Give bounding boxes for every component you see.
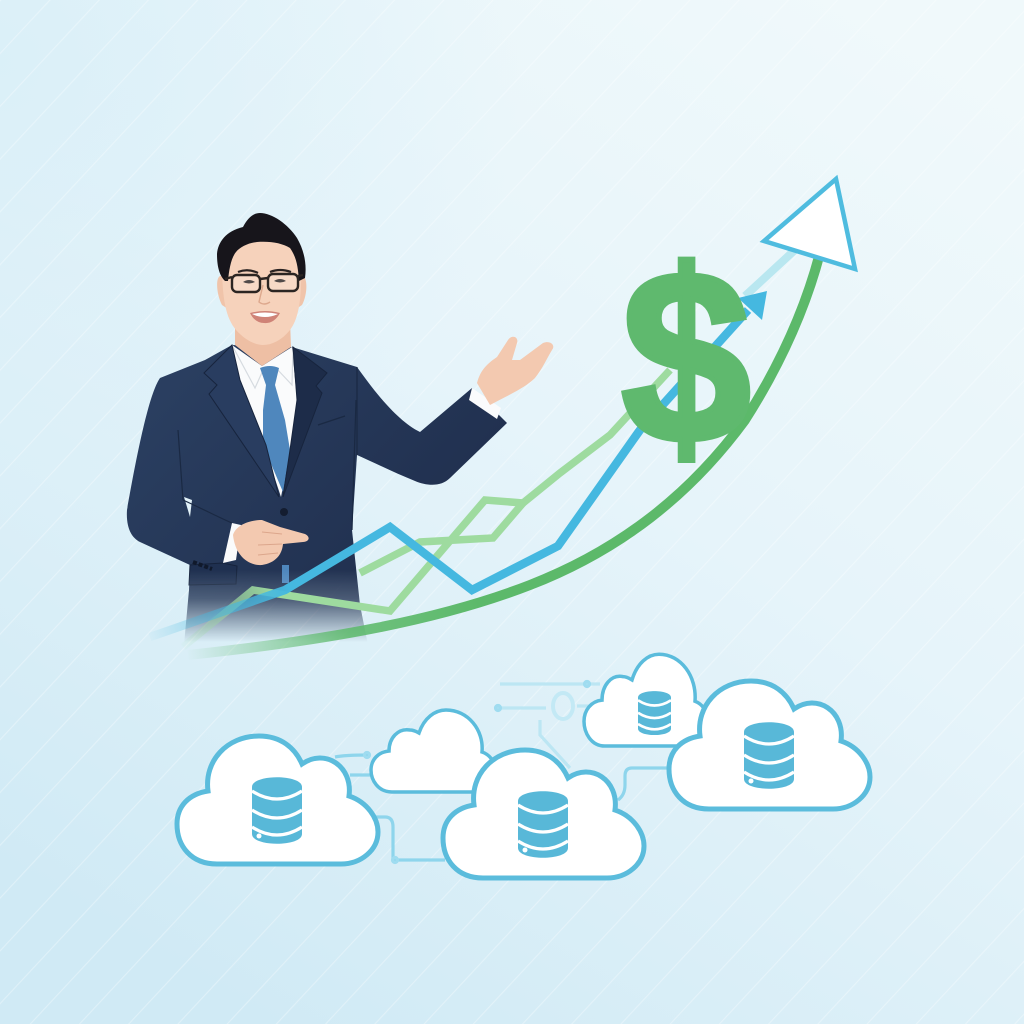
database icon [518,791,568,858]
neck [235,328,291,366]
pointing hand [233,520,309,565]
collar shading [232,345,293,388]
right cuff [469,388,501,419]
network connectors [335,682,670,862]
right lapel [283,347,327,497]
cloud: right database [669,681,870,809]
smile [250,311,280,323]
cloud: top small database [584,654,708,746]
button [280,508,288,516]
face [222,235,301,345]
left lapel [204,345,279,497]
suit body [127,345,507,645]
coat pocket flap [189,563,237,585]
hair [217,213,306,281]
cloud: centre database [443,750,644,878]
blue arrowhead [738,291,767,320]
ears [217,276,306,309]
gap between arm and torso [184,497,192,517]
light green line A [183,370,670,647]
light green line B [360,503,523,573]
eyes [243,279,286,284]
chart: growth lines [150,248,820,655]
large arrowhead [764,179,855,269]
cloud: middle empty [371,710,495,792]
shirt [232,345,297,497]
person: presenter in suit [127,213,553,645]
pale blue arrow band [745,248,797,296]
left cuff [223,523,241,563]
raised hand [477,337,553,405]
nose [259,285,270,304]
arm and pocket details [178,367,357,530]
lower tie fragment [282,565,289,583]
finger creases [258,532,282,555]
cloud: left database [177,736,378,864]
database icon [744,722,794,789]
glasses [225,274,303,292]
database icon [638,691,671,735]
blue line [150,310,748,637]
tie [260,366,290,492]
green rising curve [188,253,820,655]
dollar sign: $ [621,220,751,494]
sleeve buttons [193,562,212,569]
database icon [252,777,302,844]
eyebrows [238,270,291,273]
